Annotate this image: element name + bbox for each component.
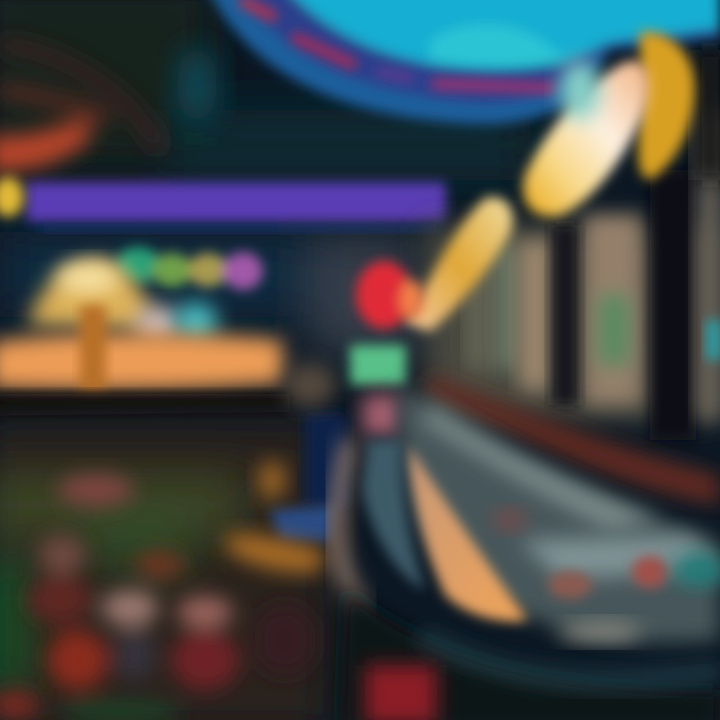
orange counter band xyxy=(0,305,290,416)
orange wedge on table xyxy=(408,445,528,621)
pink block below green xyxy=(362,394,402,436)
red arc top left xyxy=(0,45,160,172)
yellow bar end xyxy=(0,177,24,217)
large yellow and white brush xyxy=(523,32,695,217)
background: upper dark zone xyxy=(0,0,530,355)
teal glow top left xyxy=(177,47,217,123)
red ball xyxy=(356,261,424,329)
roulette table surface xyxy=(399,385,720,642)
table black rim xyxy=(340,585,720,720)
figure: blue and orange xyxy=(225,363,347,573)
mid yellow brush xyxy=(405,197,513,332)
ceiling arc: blue dome xyxy=(205,0,720,124)
green block xyxy=(350,345,406,385)
purple bar xyxy=(26,182,446,232)
slot machines row xyxy=(425,50,720,440)
lower left floor xyxy=(0,425,330,720)
table left rim xyxy=(337,440,365,610)
red base xyxy=(365,665,437,720)
golden dome xyxy=(28,260,218,342)
colour dots row xyxy=(116,247,263,290)
poker chips xyxy=(0,474,315,720)
ceiling arc: red stripes xyxy=(244,2,552,88)
red floor strip xyxy=(425,375,720,505)
table grey blue side xyxy=(362,440,425,590)
